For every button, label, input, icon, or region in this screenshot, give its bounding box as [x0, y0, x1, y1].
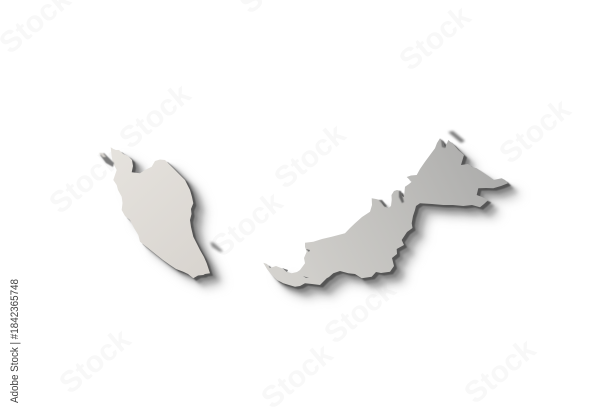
- Sabah north bay shadow: [441, 139, 445, 148]
- Brunei bay shadow: [399, 191, 404, 203]
- Limbang inlet shadow: [379, 200, 387, 207]
- watermark: faint diagonal Adobe Stock marks: Stock: [268, 117, 352, 195]
- watermark: faint diagonal Adobe Stock marks: Stock: [318, 272, 402, 350]
- peninsula extruded shadow: [114, 150, 223, 289]
- watermark: faint diagonal Adobe Stock marks: Stock: [493, 92, 577, 170]
- credit: Adobe Stock image number: Adobe Stock | #1842365748: [9, 279, 21, 403]
- island: northwest islet: [99, 153, 114, 167]
- island: southeast islet: [210, 242, 223, 252]
- Sarawak coast inlets: [282, 249, 310, 278]
- East Malaysia extruded shadow: [266, 141, 521, 299]
- map: Peninsular Malaysia: [99, 147, 223, 289]
- East Malaysia land surface: [263, 138, 508, 287]
- watermark: faint diagonal Adobe Stock marks: Stock: [113, 77, 197, 155]
- Sabah north island: [448, 131, 465, 143]
- watermark: faint diagonal Adobe Stock marks: Stock: [458, 332, 542, 410]
- peninsula land surface: [111, 147, 210, 278]
- map: East Malaysia (Sarawak and Sabah): [263, 131, 521, 299]
- watermark: faint diagonal Adobe Stock marks: Stock: [53, 322, 137, 400]
- watermark: faint diagonal Adobe Stock marks: Stock: [255, 337, 339, 415]
- watermark: faint diagonal Adobe Stock marks: Stock: [393, 0, 477, 77]
- watermark: faint diagonal Adobe Stock marks: Stock: [205, 185, 289, 263]
- watermark: faint diagonal Adobe Stock marks: Stock: [43, 142, 127, 220]
